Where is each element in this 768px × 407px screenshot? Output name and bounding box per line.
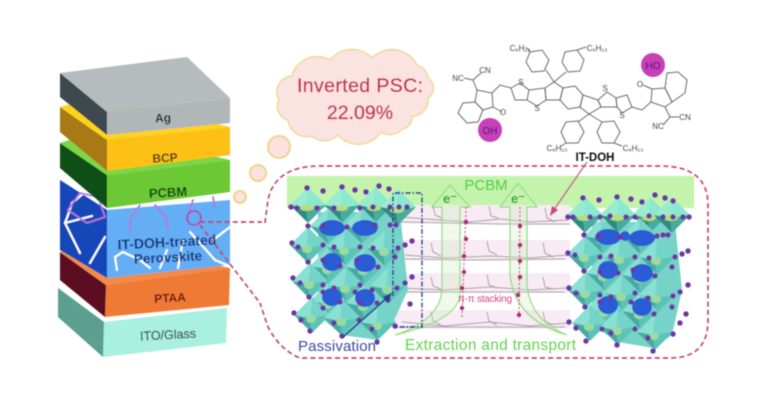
layer: ITO/Glass: ITO/Glass (140, 327, 196, 343)
label: PCBM: PCBM (464, 177, 508, 194)
layer: IT-DOH-treated Perovskite: IT-DOH-treated (117, 231, 217, 253)
molecule: IT-DOH structure: C₆H₁₃ (547, 144, 567, 153)
label: pi-pi stacking: π-π stacking (458, 294, 512, 305)
label: Passivation: Passivation (298, 338, 376, 355)
layer: Ag: Ag (155, 111, 171, 125)
molecule: IT-DOH structure: CN (679, 113, 691, 122)
band: PCBM layer (287, 176, 694, 208)
label: IT-DOH: IT-DOH (576, 152, 614, 164)
arrow: passivation pointer (343, 293, 392, 337)
halide atoms (565, 192, 692, 354)
layer: IT-DOH-treated Perovskite (60, 180, 230, 278)
label: Extraction and transport: Extraction and transport (405, 337, 577, 354)
badge: OH group: OH (482, 126, 498, 137)
label: e-: e⁻ (443, 191, 457, 206)
molecule: IT-DOH structure: S (518, 78, 524, 87)
arrow: right electron extraction (500, 183, 567, 335)
arrow: IT-DOH pointer (550, 162, 587, 216)
thought bubble trail circles (234, 136, 290, 203)
lattice: left perovskite crystal (288, 183, 416, 345)
molecule: IT-DOH structure (452, 44, 691, 153)
badge: HO group: HO (646, 61, 661, 72)
layer: PCBM: PCBM (149, 184, 188, 201)
molecule: IT-DOH structure: C₆H₁₃ (510, 44, 530, 53)
panel: device layer stack (58, 57, 230, 357)
grain boundaries (65, 193, 230, 270)
molecule: IT-DOH structure: S (602, 84, 608, 93)
arrow: left electron extraction (395, 185, 470, 335)
badge: OH group (478, 118, 502, 142)
halide atoms (288, 183, 415, 345)
panel: IT-DOH stacking region (395, 205, 570, 329)
panel: dashed zoom-in frame (200, 166, 708, 358)
layer: PTAA: PTAA (154, 290, 187, 306)
molecule: IT-DOH structure: O (500, 108, 506, 117)
badge: HO group (641, 53, 665, 77)
lead-site blue spheres (319, 220, 378, 307)
layer: ITO/Glass (58, 288, 227, 357)
molecule: IT-DOH structure: C₆H₁₃ (587, 44, 607, 53)
molecule: IT-DOH structure: NC (452, 74, 464, 83)
molecule: IT-DOH structure: C₆H₁₃ (623, 144, 643, 153)
molecule: IT-DOH structure: CN (479, 66, 491, 75)
stacked molecules (400, 205, 570, 327)
molecule: IT-DOH structure: S (619, 111, 625, 120)
layer: Ag (60, 57, 230, 135)
passivation dash-dot box (393, 193, 422, 327)
lead-site blue spheres (595, 229, 655, 316)
molecule: IT-DOH structure: O (637, 80, 643, 89)
molecule: IT-DOH structure: NC (652, 122, 664, 131)
pi-pi stacking dotted markers (460, 207, 522, 318)
lattice: right perovskite crystal (565, 192, 692, 354)
callout: inverted PSC efficiency cloud: 22.09% (327, 102, 393, 124)
callout: inverted PSC efficiency cloud (277, 49, 433, 144)
layer: BCP: BCP (152, 150, 178, 166)
molecule: IT-DOH structure: S (534, 104, 540, 113)
layer: PCBM (60, 130, 230, 208)
callout: inverted PSC efficiency cloud: Inverted PSC: (297, 75, 423, 97)
layer: BCP (60, 95, 230, 171)
label: e-: e⁻ (511, 191, 525, 206)
purple IT-DOH traces (68, 193, 215, 232)
layer: IT-DOH-treated Perovskite: Perovskite (133, 248, 203, 267)
layer: PTAA (60, 240, 230, 317)
